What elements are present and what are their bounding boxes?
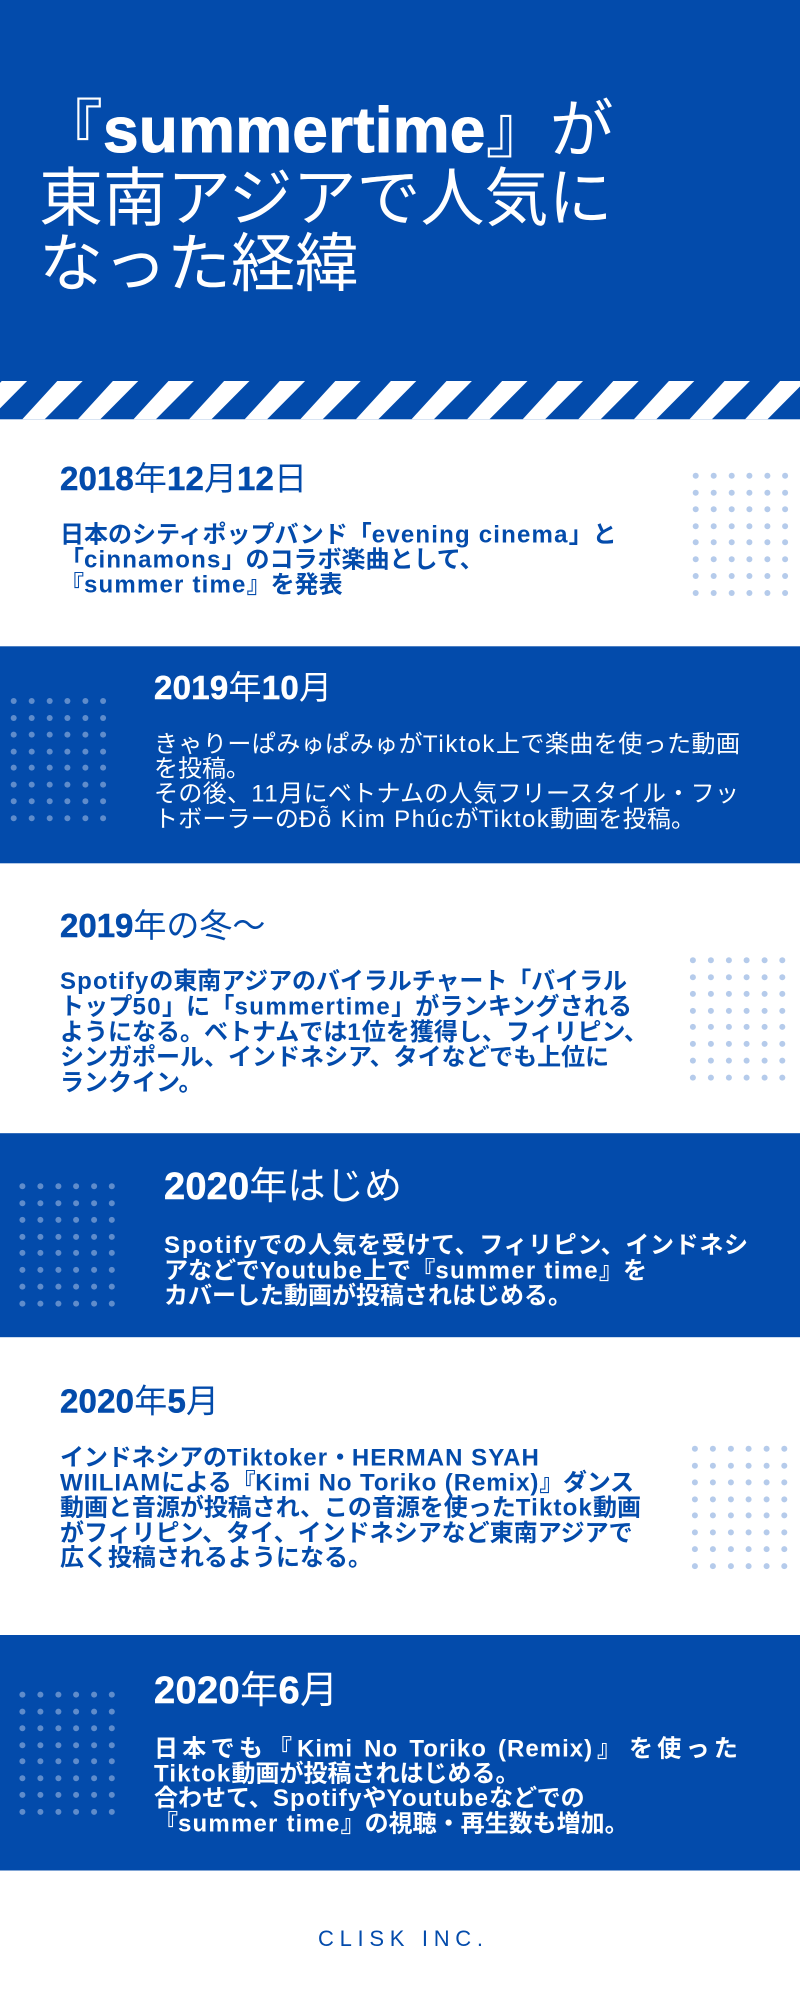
text block: japan spread: 『 bbox=[268, 1736, 292, 1763]
text block: herman syah dance: インドネシアのTiktoker・HERMAN SYAH bbox=[60, 1444, 540, 1471]
text block: tiktok posts: きゃりーぱみゅぱみゅがTiktok上で楽曲を使った動画 bbox=[154, 731, 740, 758]
text block: spotify viral chart: トップ50」に「summertime」がランキングされる bbox=[60, 992, 632, 1020]
text block: herman syah dance: 広く投稿されるようになる。 bbox=[60, 1545, 372, 1572]
text block: japan spread: 』 bbox=[597, 1736, 621, 1763]
text block: herman syah dance: がフィリピン、タイ、インドネシアなど東南アジアで bbox=[60, 1519, 633, 1547]
text block: japan spread: を使った bbox=[629, 1736, 742, 1763]
text block: release bbox=[60, 522, 617, 599]
text block: japan spread: Kimi No Toriko (Remix) bbox=[297, 1736, 593, 1763]
text block: spotify viral chart bbox=[60, 968, 648, 1096]
footer: company name: CLISK INC. bbox=[318, 1926, 489, 1951]
title: なった経緯 bbox=[39, 228, 359, 300]
text block: spotify viral chart: シンガポール、インドネシア、タイなどでも上位に bbox=[60, 1044, 609, 1071]
text block: herman syah dance: WIILIAMによる『Kimi No Toriko (Remix)』ダンス bbox=[60, 1469, 634, 1497]
heading: 2020年6月: 2020年6月 bbox=[154, 1670, 338, 1712]
panel: 2020年6月 bbox=[0, 1635, 800, 1870]
text block: release: 「cinnamons」のコラボ楽曲として、 bbox=[60, 546, 484, 574]
dot grid bbox=[690, 957, 785, 1081]
text block: tiktok posts: を投稿。 bbox=[154, 756, 250, 782]
text block: youtube covers: アなどでYoutube上で『summer time』を bbox=[164, 1257, 647, 1284]
title: 『summertime』が bbox=[39, 94, 614, 166]
text block: herman syah dance: 動画と音源が投稿され、この音源を使ったTiktok動画 bbox=[60, 1494, 641, 1522]
panel: 2019年10月 bbox=[0, 646, 800, 863]
text block: tiktok posts: その後、11月にベトナムの人気フリースタイル・フッ bbox=[154, 780, 739, 808]
dot grid bbox=[19, 1692, 115, 1815]
heading: 2019年10月: 2019年10月 bbox=[154, 669, 332, 706]
heading: 2018年12月12日: 2018年12月12日 bbox=[60, 460, 307, 497]
text block: herman syah dance bbox=[60, 1444, 641, 1572]
text block: release: 『summer time』を発表 bbox=[60, 572, 343, 599]
diagonal stripe band bbox=[0, 381, 800, 419]
text block: youtube covers bbox=[164, 1232, 748, 1309]
title bbox=[39, 94, 614, 300]
text block: japan spread: 『summer time』の視聴・再生数も増加。 bbox=[154, 1811, 629, 1838]
text block: japan spread bbox=[154, 1736, 742, 1838]
text block: japan spread: 合わせて、SpotifyやYoutubeなどでの bbox=[154, 1785, 585, 1812]
text block: tiktok posts bbox=[154, 731, 740, 833]
text block: release: 日本のシティポップバンド「evening cinema」と bbox=[60, 522, 617, 548]
text block: spotify viral chart: ようになる。ベトナムでは1位を獲得し、フィリピン、 bbox=[60, 1019, 648, 1046]
dot grid bbox=[693, 473, 788, 596]
dot grid bbox=[11, 698, 106, 821]
text block: tiktok posts: トボーラーのĐỗ Kim PhúcがTiktok動画を投稿。 bbox=[154, 806, 695, 833]
heading: 2020年5月: 2020年5月 bbox=[60, 1382, 219, 1420]
heading: 2020年はじめ: 2020年はじめ bbox=[164, 1166, 402, 1208]
dot grid bbox=[19, 1183, 115, 1307]
panel: 2020年はじめ bbox=[0, 1133, 800, 1337]
text block: spotify viral chart: ランクイン。 bbox=[60, 1069, 203, 1096]
text block: japan spread: Tiktok動画が投稿されはじめる。 bbox=[154, 1760, 519, 1788]
panel: 2018年12月12日 bbox=[60, 460, 788, 599]
dot grid bbox=[692, 1446, 787, 1569]
text block: japan spread: 日本でも bbox=[154, 1736, 267, 1763]
heading: 2019年の冬～: 2019年の冬～ bbox=[60, 907, 265, 944]
title: 東南アジアで人気に bbox=[39, 162, 612, 234]
text block: youtube covers: カバーした動画が投稿されはじめる。 bbox=[164, 1281, 572, 1309]
panel: header bbox=[0, 0, 800, 419]
text block: youtube covers: Spotifyでの人気を受けて、フィリピン、インドネシ bbox=[164, 1232, 748, 1259]
panel: 2019年の冬～ bbox=[60, 907, 785, 1096]
panel: 2020年5月 bbox=[60, 1382, 787, 1572]
text block: spotify viral chart: Spotifyの東南アジアのバイラルチャート「バイラル bbox=[60, 968, 627, 995]
